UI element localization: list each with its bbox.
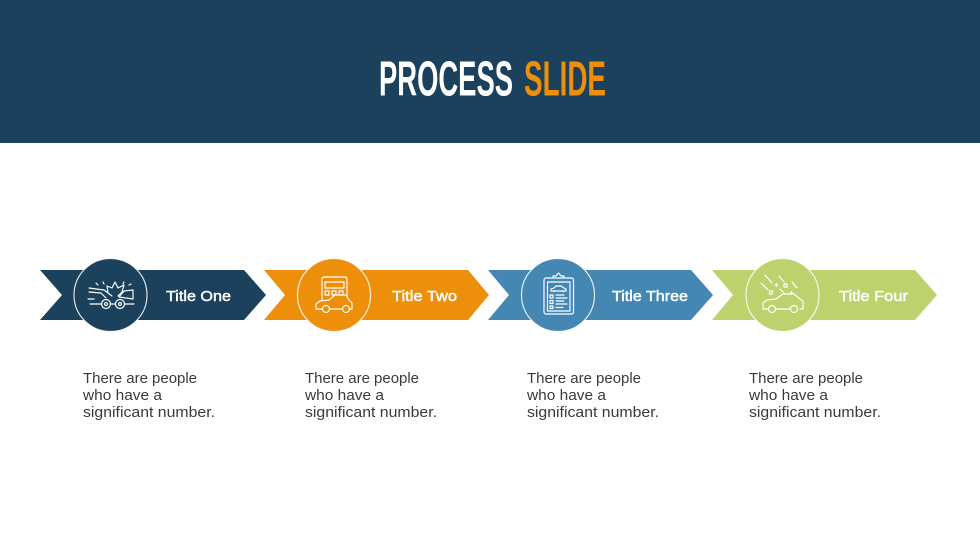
description one: There are people bbox=[83, 370, 197, 387]
title: PROCESS bbox=[379, 52, 513, 106]
step four arrow bbox=[712, 258, 937, 332]
description four: There are people bbox=[749, 370, 863, 387]
description one: significant number. bbox=[83, 404, 215, 421]
step three label: Title Three bbox=[612, 288, 688, 305]
description three: There are people bbox=[527, 370, 641, 387]
description two bbox=[304, 370, 437, 421]
step three arrow bbox=[488, 258, 713, 332]
step one label: Title One bbox=[166, 288, 231, 305]
step four label: Title Four bbox=[839, 288, 908, 305]
description three: significant number. bbox=[527, 404, 659, 421]
description three bbox=[526, 370, 659, 421]
icon: clipboard checklist bbox=[544, 273, 574, 314]
description two: There are people bbox=[305, 370, 419, 387]
icon: car crash bbox=[88, 282, 134, 308]
description two: who have a bbox=[304, 387, 385, 404]
step two label: Title Two bbox=[392, 288, 457, 305]
icon: car with calculator bbox=[316, 277, 352, 312]
step one arrow bbox=[40, 258, 266, 332]
icon: car in falling debris bbox=[761, 275, 803, 312]
title: SLIDE bbox=[524, 52, 606, 106]
description one bbox=[82, 370, 215, 421]
step two arrow bbox=[264, 258, 489, 332]
description one: who have a bbox=[82, 387, 163, 404]
description four: significant number. bbox=[749, 404, 881, 421]
description two: significant number. bbox=[305, 404, 437, 421]
description four bbox=[748, 370, 881, 421]
header band bbox=[0, 0, 980, 143]
description four: who have a bbox=[748, 387, 829, 404]
description three: who have a bbox=[526, 387, 607, 404]
